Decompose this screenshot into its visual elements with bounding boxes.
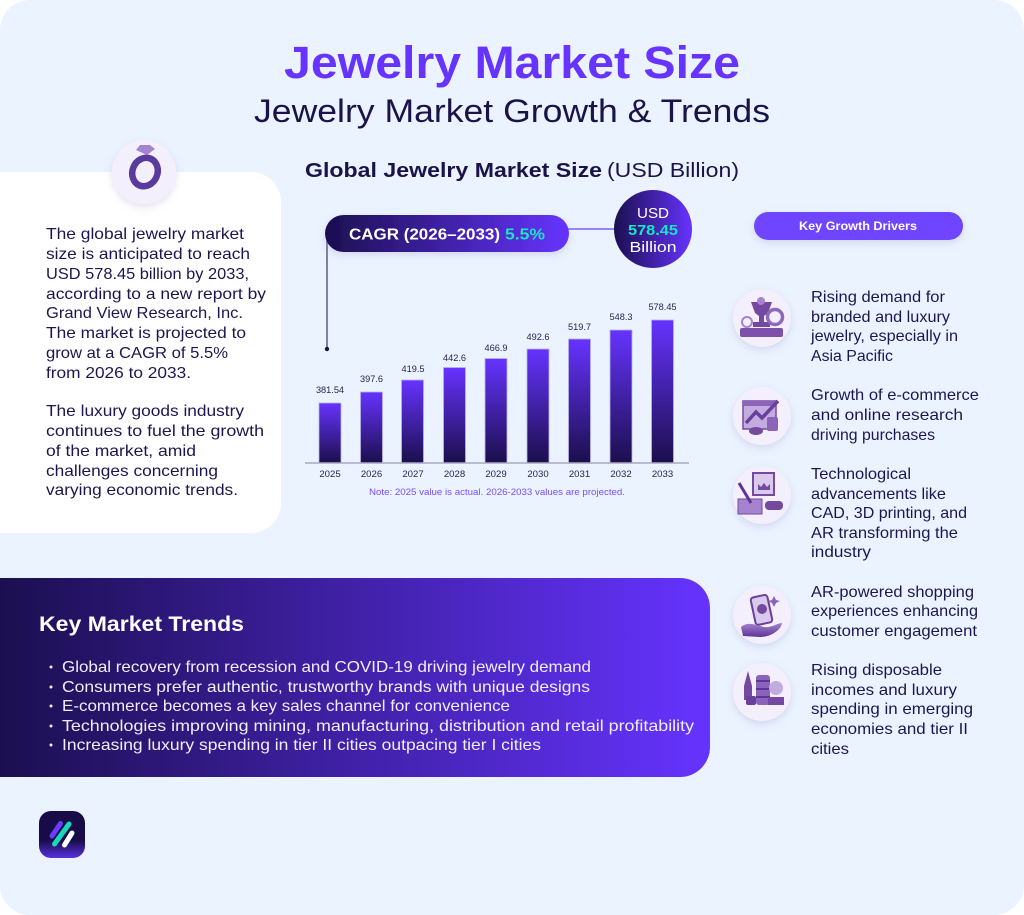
bar chart — [305, 302, 689, 480]
overview text block: Grand View Research, Inc. — [46, 305, 243, 322]
icon: growth chart — [733, 387, 791, 445]
bar chart: 419.5 — [402, 364, 424, 374]
driver 3 text: industry — [811, 544, 871, 561]
bar chart: 2025 — [319, 469, 341, 480]
bar chart: 2029 — [485, 469, 507, 480]
bar chart: 2031 — [569, 469, 590, 480]
driver 1 text — [810, 289, 958, 365]
driver 1 text: jewelry, especially in — [810, 328, 958, 345]
CAGR pill: CAGR (2026–2033) — [349, 226, 500, 244]
Key Growth Drivers pill — [754, 212, 963, 240]
driver 1 text: Asia Pacific — [811, 348, 893, 365]
driver 2 text: driving purchases — [811, 427, 935, 444]
driver 2 text: Growth of e-commerce — [811, 387, 979, 404]
driver 3 text: CAD, 3D printing, and — [811, 505, 967, 522]
bar chart: 381.54 — [316, 385, 344, 395]
total value circle: Billion — [630, 239, 676, 256]
trends list: E-commerce becomes a key sales channel for convenience — [62, 698, 510, 715]
trends list: Technologies improving mining, manufacturing, distribution and retail profitability — [62, 718, 694, 735]
bar chart: 2028 — [444, 469, 465, 480]
trends list: Increasing luxury spending in tier II cities outpacing tier I cities — [62, 737, 541, 754]
driver 1 text: branded and luxury — [811, 309, 950, 326]
overview text block: of the market, amid — [46, 443, 196, 460]
trends list — [50, 659, 694, 754]
driver 3 text: AR transforming the — [811, 525, 958, 542]
driver 5 text: cities — [811, 741, 849, 758]
chart note: Note: 2025 value is actual. 2026-2033 values are projected. — [369, 486, 625, 497]
overview text block: The luxury goods industry — [46, 403, 244, 420]
total value circle: USD — [637, 205, 669, 222]
driver 3 — [733, 466, 967, 561]
subtitle: Jewelry Market Growth & Trends — [254, 93, 770, 129]
overview text block — [46, 226, 266, 499]
chart heading: (USD Billion) — [607, 160, 739, 182]
title: Jewelry Market Size — [284, 37, 740, 88]
panel: key market trends — [0, 578, 710, 777]
overview text block: size is anticipated to reach — [46, 246, 250, 263]
bar chart: 548.3 — [610, 312, 632, 322]
bar chart: 466.9 — [484, 343, 508, 353]
icon: coins and city — [733, 663, 791, 721]
overview text block: continues to fuel the growth — [46, 423, 264, 440]
driver 3 text: advancements like — [811, 486, 946, 503]
icon: 3D printer and AR headset — [733, 466, 791, 524]
overview text block: according to a new report by — [46, 286, 266, 303]
driver 5 text: Rising disposable — [811, 662, 942, 679]
overview text block: grow at a CAGR of 5.5% — [46, 345, 228, 362]
driver 4 text — [811, 584, 978, 640]
icon: ring — [112, 140, 176, 204]
overview text block: challenges concerning — [46, 463, 218, 480]
bar chart: 442.6 — [443, 353, 466, 363]
icon: trophy with jewelry — [733, 289, 791, 347]
trends list: Global recovery from recession and COVID-19 driving jewelry demand — [62, 659, 591, 676]
driver 1 — [733, 289, 958, 365]
driver 2 text: and online research — [811, 407, 963, 424]
bar chart: 2030 — [527, 469, 549, 480]
driver 4 text: experiences enhancing — [811, 603, 978, 620]
connector: CAGR to total — [565, 228, 618, 230]
driver 1 text: Rising demand for — [811, 289, 945, 306]
overview text block: USD 578.45 billion by 2033, — [46, 266, 249, 283]
chart heading — [305, 160, 739, 182]
overview text block: varying economic trends. — [46, 482, 238, 499]
driver 5 text: incomes and luxury — [811, 682, 957, 699]
bar chart: 519.7 — [568, 322, 591, 332]
driver 4 text: AR-powered shopping — [811, 584, 974, 601]
driver 5 text — [811, 662, 973, 758]
driver 5 text: economies and tier II — [811, 721, 968, 738]
driver 3 text: Technological — [811, 466, 911, 483]
chart heading: Global Jewelry Market Size — [305, 160, 602, 182]
driver 4 — [733, 584, 978, 644]
bar chart: 397.6 — [360, 374, 383, 384]
Key Growth Drivers pill: Key Growth Drivers — [799, 219, 917, 233]
total value circle: 578.45 — [628, 222, 678, 239]
total value circle — [614, 190, 692, 268]
icon: logo — [39, 811, 85, 858]
overview text block: The global jewelry market — [46, 226, 245, 243]
bar chart: 578.45 — [648, 302, 677, 312]
overview text block: from 2026 to 2033. — [46, 365, 191, 382]
driver 3 text — [811, 466, 967, 561]
CAGR pill — [325, 215, 569, 252]
trends list: Consumers prefer authentic, trustworthy brands with unique designs — [62, 679, 590, 696]
bar chart: 492.6 — [526, 332, 550, 342]
connector: CAGR to first bar — [325, 238, 329, 351]
driver 5 text: spending in emerging — [811, 701, 973, 718]
bar chart: 2026 — [361, 469, 382, 480]
trends heading: Key Market Trends — [39, 613, 244, 636]
bar chart: 2033 — [652, 469, 673, 480]
driver 2 text — [811, 387, 979, 444]
bar chart: 2027 — [402, 469, 424, 480]
CAGR pill: 5.5% — [505, 226, 545, 244]
overview text block: The market is projected to — [46, 325, 246, 342]
bar chart: 2032 — [610, 469, 632, 480]
panel: market overview — [0, 172, 281, 533]
driver 5 — [733, 662, 973, 758]
icon: hand holding phone — [733, 586, 791, 644]
driver 2 — [733, 387, 979, 445]
driver 4 text: customer engagement — [811, 623, 978, 640]
